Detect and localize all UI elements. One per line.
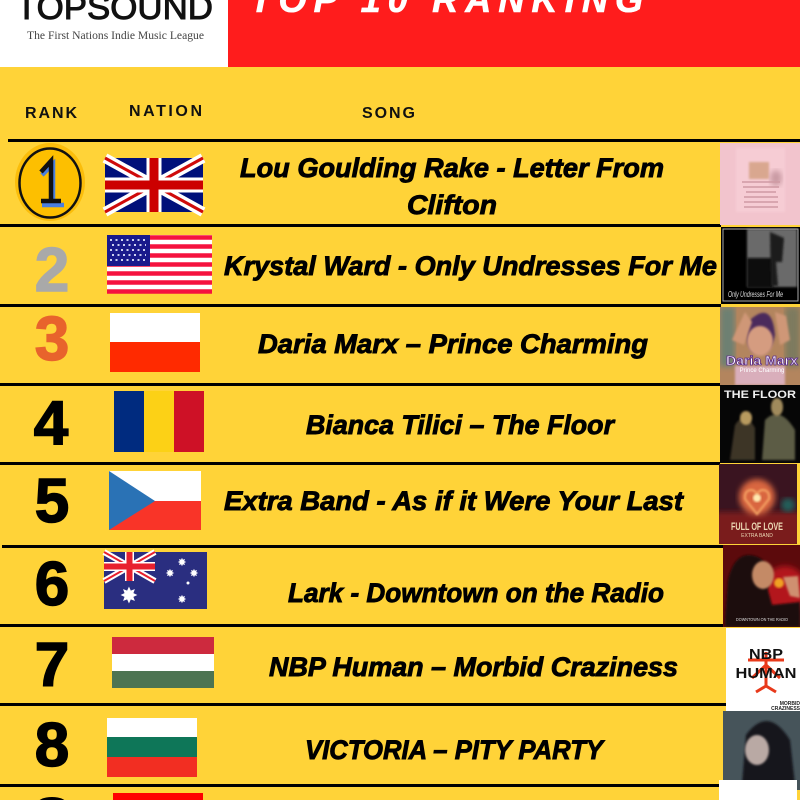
album cover 4: THE FLOOR [724, 389, 796, 401]
flag: Poland [110, 313, 200, 372]
flag: Australia: ✸ [165, 568, 175, 580]
logo panel [0, 0, 228, 67]
column headers [25, 103, 415, 122]
rank numbers: 8 [35, 711, 69, 780]
flag: USA [107, 235, 212, 293]
flag: Australia: ✸ [177, 594, 187, 606]
song titles: Extra Band - As if it Were Your Last [224, 486, 684, 516]
rank numbers: 6 [35, 550, 69, 619]
album cover 5 [719, 464, 797, 544]
album cover 7: HUMAN [736, 665, 796, 682]
rank numbers: 2 [35, 236, 69, 305]
song titles: Krystal Ward - Only Undresses For Me [224, 251, 717, 281]
song titles: Clifton [407, 190, 497, 220]
column headers: NATION [129, 103, 202, 120]
rank 9 number partial [37, 797, 67, 800]
album cover 5: EXTRA BAND [741, 533, 773, 539]
flag: UK [105, 158, 203, 212]
flag: Czech Republic [109, 471, 201, 530]
album cover 7: CRAZINESS [771, 706, 800, 712]
album cover 2 [721, 227, 800, 304]
album cover 3: Prince Charming [740, 368, 784, 374]
rank numbers [34, 236, 69, 780]
flag: rank 9 partial [113, 793, 203, 800]
song titles: Lou Goulding Rake - Letter From [240, 153, 664, 183]
album cover 3 [720, 307, 800, 385]
album cover 6 [723, 545, 800, 627]
song titles: Lark - Downtown on the Radio [288, 578, 664, 608]
flag: Romania [114, 391, 204, 452]
album cover 7 [726, 628, 800, 712]
flag: Hungary [112, 637, 214, 688]
album cover 7: NBP [749, 646, 783, 663]
flag: Bulgaria [107, 718, 197, 777]
album cover 4 [720, 385, 800, 463]
album cover 8 [723, 711, 800, 790]
song titles: Bianca Tilici – The Floor [306, 410, 615, 440]
song titles: VICTORIA – PITY PARTY [305, 735, 606, 765]
flag: Australia: ✸ [120, 583, 138, 608]
album cover 9 partial [719, 780, 797, 800]
rank numbers: 3 [35, 305, 69, 374]
rank numbers: 4 [34, 389, 69, 458]
flag: Australia: ✸ [189, 568, 199, 580]
song titles: Daria Marx – Prince Charming [258, 329, 649, 359]
flag: Australia [104, 552, 207, 609]
album cover 6: DOWNTOWN ON THE RADIO [736, 617, 788, 622]
rank numbers: 5 [35, 467, 69, 536]
album cover 1 [720, 143, 800, 225]
song titles [224, 153, 717, 765]
title banner [228, 0, 800, 67]
logo panel: The First Nations Indie Music League [27, 28, 204, 42]
album cover 3: Daria Marx [726, 353, 799, 368]
rank 1 medal [15, 143, 85, 221]
column headers: RANK [25, 105, 77, 122]
flag: Australia: ✸ [177, 557, 187, 569]
column headers: SONG [362, 105, 415, 122]
song titles: NBP Human – Morbid Craziness [269, 652, 678, 682]
album cover 7: MORBID [780, 701, 800, 707]
rank numbers: 7 [35, 631, 69, 700]
